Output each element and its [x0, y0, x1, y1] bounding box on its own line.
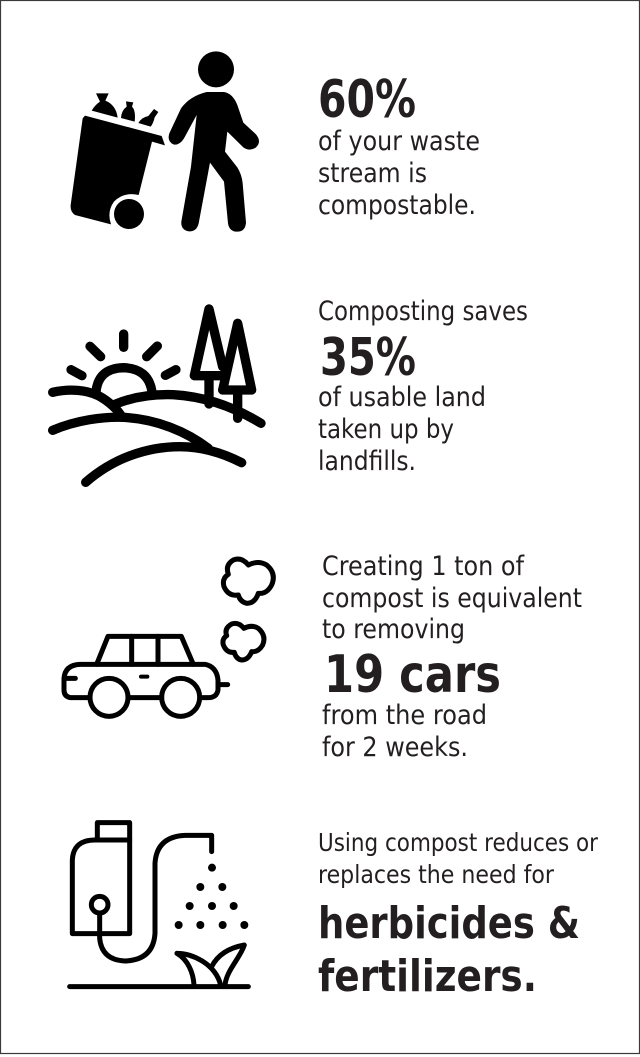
text: herbicides and fertilizers: herbicides & [318, 898, 580, 949]
text: herbicides and fertilizers: fertilizers. [318, 951, 537, 1002]
text: 35% stat: of usable land [318, 382, 486, 413]
text: 60% stat: of your waste [318, 126, 480, 157]
text: 19 cars stat: from the road [322, 700, 487, 731]
text: herbicides and fertilizers: replaces the need for [318, 860, 555, 889]
text: 19 cars stat: compost is equivalent [322, 583, 582, 614]
text: 35% stat: Composting saves [318, 296, 528, 327]
icon: sun, hills and trees [53, 309, 261, 482]
text: 35% stat: landfills. [318, 446, 416, 477]
icon: person with trash bin [71, 51, 259, 232]
text: 19 cars stat: to removing [322, 614, 465, 645]
text: herbicides and fertilizers [318, 828, 599, 1002]
icon: sprayer bottle and plant [70, 823, 248, 987]
text: 35% stat [318, 296, 528, 477]
text: 60% stat [318, 70, 480, 221]
text: 60% stat: 60% [318, 70, 416, 130]
text: 19 cars stat [322, 551, 582, 763]
text: 35% stat: 35% [320, 328, 416, 388]
text: 19 cars stat: 19 cars [324, 645, 501, 705]
text: 60% stat: compostable. [318, 190, 476, 221]
text: 60% stat: stream is [318, 158, 427, 189]
text: 19 cars stat: Creating 1 ton of [322, 551, 525, 582]
text: herbicides and fertilizers: Using compost reduces or [318, 828, 599, 857]
text: 19 cars stat: for 2 weeks. [322, 732, 468, 763]
icon: car with exhaust clouds [64, 559, 273, 716]
text: 35% stat: taken up by [318, 414, 454, 445]
